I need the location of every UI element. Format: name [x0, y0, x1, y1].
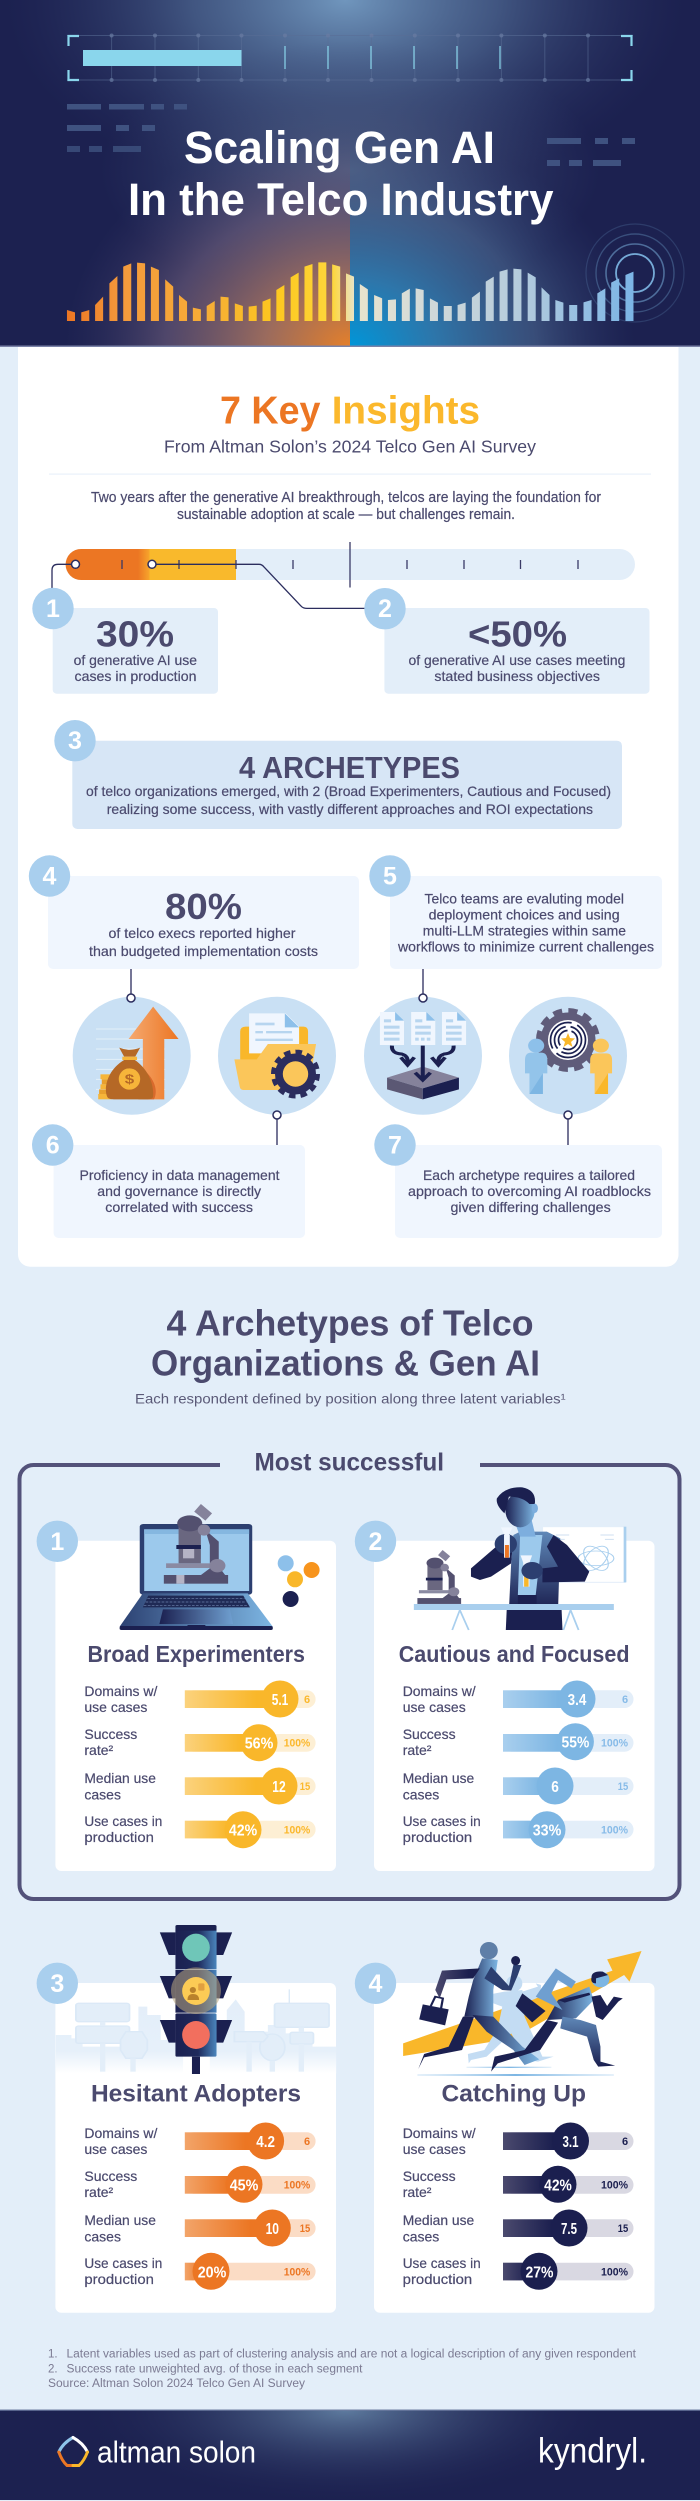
row: production: 33% [533, 1823, 561, 1840]
row: domains: 3.1 [562, 2134, 579, 2151]
footnotes: Success rate unweighted avg. of those in each segment [66, 2364, 363, 2376]
insight 7: given differing challenges [450, 1199, 611, 1215]
row: production: 100% [284, 1824, 310, 1836]
row: domains: 6 [622, 1694, 628, 1706]
row: success: 56% [245, 1736, 273, 1753]
connector 4 [127, 969, 135, 1002]
insight 4: 4 [43, 862, 57, 890]
insight 3: realizing some success, with vastly different approaches and ROI expectations [107, 801, 593, 817]
row: median: 12 [272, 1779, 286, 1796]
row: domains: Domains w/ [403, 1683, 476, 1699]
footnotes [48, 2349, 637, 2390]
footnotes: 2. [48, 2364, 58, 2376]
row: median: Median use [84, 1770, 156, 1786]
footnotes: 1. [48, 2349, 58, 2361]
heading: 4 archetypes [135, 1303, 566, 1406]
row: production [403, 1811, 634, 1848]
row: production: 100% [601, 2266, 628, 2278]
badge 3 [37, 1963, 78, 2004]
insight 6: correlated with success [105, 1199, 253, 1215]
insight 7 [374, 1124, 662, 1238]
row: success: 100% [601, 2180, 628, 2192]
row: success [84, 2166, 316, 2203]
row: production: production [403, 2271, 472, 2287]
insight 6: 6 [46, 1132, 60, 1160]
card title: Broad Experimenters [88, 1641, 305, 1667]
insight 1: 1 [46, 595, 60, 623]
card 1: Broad Experimenters [37, 1504, 336, 1871]
row: median [403, 1768, 634, 1804]
insight 2: <50% [468, 614, 567, 655]
row: production: production [84, 1829, 154, 1845]
row: domains [403, 2122, 634, 2160]
illustration: laptop with microscope [120, 1504, 273, 1630]
connector 6 [273, 1111, 281, 1145]
row: median: 6 [551, 1779, 559, 1796]
row: domains [84, 2122, 316, 2160]
decorative data pixels right [547, 138, 635, 166]
insight 3 [54, 720, 622, 829]
row: median: cases [403, 2228, 439, 2244]
insight 7: Each archetype requires a tailored [423, 1167, 635, 1183]
row: success: 100% [284, 2180, 310, 2192]
insight 1 [32, 588, 218, 694]
insight 3: 4 ARCHETYPES [239, 750, 460, 785]
icon: folder and gear [218, 997, 336, 1115]
row: success: rate² [84, 2184, 114, 2200]
title: Scaling Gen AI [184, 122, 495, 173]
progress timeline [52, 542, 635, 608]
row: success: rate² [403, 2184, 432, 2200]
row: production: 100% [601, 1824, 628, 1836]
heading: 7 Key Insights [220, 389, 480, 432]
insight 1: 30% [96, 614, 174, 655]
card 3: Hesitant Adopters [37, 1925, 336, 2313]
row: median: 15 [618, 1781, 628, 1793]
row: median: cases [84, 2228, 121, 2244]
logo: altman solon: altman solon [97, 2435, 256, 2470]
row: success: rate² [84, 1742, 114, 1758]
icon: money bag [73, 997, 191, 1115]
insight 6 [32, 1124, 305, 1238]
row: median: 15 [300, 2223, 310, 2235]
insight 6: Proficiency in data management [80, 1167, 280, 1183]
row: median [84, 1768, 316, 1804]
row: domains: 5.1 [272, 1692, 288, 1709]
row: median: Median use [403, 2212, 474, 2228]
heading: 7 Key Insights: 7 Key [220, 389, 321, 432]
icon: progress gauge with brackets [67, 34, 633, 82]
insight 5: workflows to minimize current challenges [397, 938, 654, 954]
intro paragraph: Two years after the generative AI breakthrough, telcos are laying the foundation for [91, 489, 601, 506]
insight 3: of telco organizations emerged, with 2 (Broad Experimenters, Cautious and Focused) [86, 783, 611, 799]
row: domains: 6 [304, 1694, 310, 1706]
row: production: 42% [229, 1823, 257, 1840]
illustration: scientist at lab table [414, 1487, 626, 1630]
illustration: traffic light [160, 1925, 232, 2074]
card title: Hesitant Adopters [91, 2080, 301, 2107]
intro paragraph: sustainable adoption at scale — but challenges remain. [177, 506, 515, 523]
subtitle: From Altman Solon’s 2024 Telco Gen AI Survey [164, 437, 536, 457]
row: median [84, 2210, 316, 2246]
row: production: 20% [198, 2264, 226, 2281]
insight 5: deployment choices and using [429, 906, 620, 922]
bar wave chart [67, 262, 633, 321]
card 2: Cautious and Focused [355, 1487, 654, 1871]
row: domains: 6 [304, 2136, 310, 2148]
card 4: Catching Up: 4 [369, 1970, 383, 1998]
card 2: Cautious and Focused: 2 [369, 1528, 382, 1556]
insight 2: of generative AI use cases meeting [408, 652, 625, 668]
insight 4: than budgeted implementation costs [89, 943, 318, 959]
row: median: 15 [618, 2223, 628, 2235]
insight 7: 7 [388, 1132, 402, 1160]
row: median: 15 [300, 1781, 310, 1793]
illustration: faded city and road signs [56, 1989, 336, 2073]
row: production: Use cases in [84, 2255, 162, 2271]
heading: 4 archetypes: Organizations & Gen AI [151, 1342, 540, 1383]
insight 5: 5 [383, 862, 397, 890]
row: domains: Domains w/ [403, 2125, 476, 2141]
card 1: Broad Experimenters: 1 [50, 1528, 64, 1556]
illustration: runners and rising arrow [403, 1942, 642, 2076]
footnotes: Source: Altman Solon 2024 Telco Gen AI Survey [48, 2378, 305, 2390]
insight 2: 2 [378, 595, 392, 623]
row: success [403, 1723, 634, 1760]
footnotes: Latent variables used as part of clustering analysis and are not a logical description of any given respondent [66, 2349, 637, 2361]
frame: most successful [20, 1449, 680, 1899]
panel: 7 key insights [18, 347, 678, 1267]
insight 4: 80% [165, 886, 242, 927]
row: domains: 4.2 [256, 2134, 275, 2151]
insight 5 [369, 855, 662, 969]
row: success: Success [84, 1726, 137, 1742]
row: domains: Domains w/ [84, 2125, 158, 2141]
row: domains: 3.4 [568, 1692, 586, 1709]
row: success: 42% [544, 2177, 572, 2194]
insight 5: Telco teams are evaluting model [424, 890, 624, 906]
row: success: Success [84, 2168, 137, 2184]
insight 6: and governance is directly [97, 1183, 261, 1199]
card title: Catching Up [442, 2080, 586, 2107]
header banner [0, 0, 700, 347]
row: success [84, 1724, 316, 1761]
row: success: 100% [284, 1738, 310, 1750]
logo: kyndryl: kyndryl. [538, 2432, 647, 2471]
insight 7: approach to overcoming AI roadblocks [408, 1183, 651, 1199]
card title: Cautious and Focused [399, 1641, 630, 1667]
card 4: Catching Up [355, 1942, 654, 2313]
row: median: cases [403, 1786, 439, 1802]
insight 4: of telco execs reported higher [108, 925, 296, 941]
row: domains [84, 1680, 316, 1718]
row: domains: use cases [403, 2141, 466, 2157]
insight 1: cases in production [74, 668, 196, 684]
row: success [403, 2166, 634, 2203]
insight 4 [29, 855, 359, 969]
connector 5 [419, 969, 427, 1002]
row: success: 45% [230, 2177, 258, 2194]
row: production: Use cases in [403, 1813, 481, 1829]
frame: most successful: Most successful [254, 1449, 444, 1477]
row: domains: 6 [622, 2136, 628, 2148]
row: success: rate² [403, 1742, 432, 1758]
insight 5: multi-LLM strategies within same [423, 922, 626, 938]
row: domains: use cases [84, 1699, 147, 1715]
row: median [403, 2210, 634, 2246]
heading: 4 archetypes: Each respondent defined by position along three latent variables¹ [135, 1390, 566, 1406]
row: production: production [84, 2271, 154, 2287]
row: domains: use cases [84, 2141, 147, 2157]
icon: money bag: $ [125, 1073, 135, 1087]
icon: two people and a maze gear [509, 997, 627, 1115]
row: median: Median use [403, 1770, 474, 1786]
badge 3: 3 [50, 1970, 64, 1998]
row: domains: use cases [403, 1699, 466, 1715]
insight 2 [364, 588, 650, 694]
insight 3: 3 [68, 727, 82, 755]
row: median: Median use [84, 2212, 156, 2228]
icon: concentric signal rings [586, 224, 684, 322]
row: production: 100% [284, 2266, 310, 2278]
icon: documents merging into a block [364, 997, 482, 1115]
row: production: Use cases in [403, 2255, 481, 2271]
connector 7 [564, 1111, 572, 1145]
icon: colored dots [278, 1555, 320, 1607]
row: domains [403, 1680, 634, 1718]
heading: 7 Key Insights: Insights [332, 389, 480, 432]
row: success: 55% [562, 1735, 589, 1752]
row: production [84, 1811, 316, 1848]
insight 2: stated business objectives [434, 668, 600, 684]
row: production: Use cases in [84, 1813, 162, 1829]
footer band [0, 2410, 700, 2500]
row: production: production [403, 1829, 472, 1845]
insight 1: of generative AI use [74, 652, 197, 668]
row: production [84, 2253, 316, 2290]
heading: 4 archetypes: 4 Archetypes of Telco [166, 1303, 534, 1344]
title: In the Telco Industry [128, 174, 554, 225]
row: median: 10 [266, 2221, 279, 2238]
row: success: Success [403, 1726, 456, 1742]
row: production: 27% [526, 2264, 554, 2281]
row: domains: Domains w/ [84, 1683, 158, 1699]
row: production [403, 2253, 634, 2290]
intro paragraph [91, 489, 601, 523]
title [128, 122, 554, 225]
row: median: 7.5 [561, 2221, 577, 2238]
row: success: 100% [601, 1738, 628, 1750]
row: median: cases [84, 1786, 121, 1802]
decorative data pixels left [67, 104, 187, 152]
row: success: Success [403, 2168, 456, 2184]
